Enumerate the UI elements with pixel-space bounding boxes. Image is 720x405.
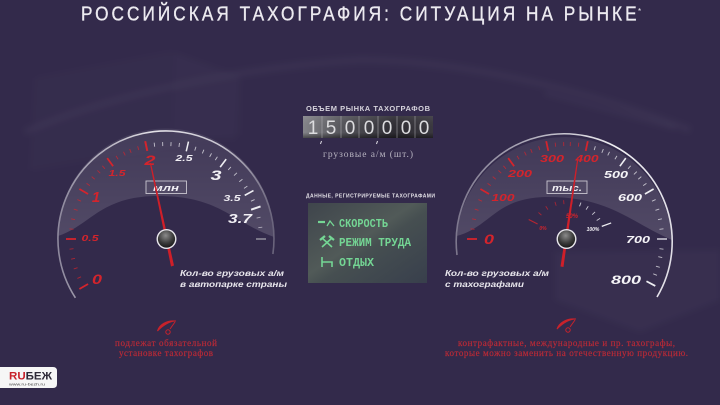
scale numbers: 2.5 — [174, 153, 193, 163]
scale numbers: 0.5 — [82, 233, 99, 243]
scale numbers: 0 — [92, 271, 102, 287]
scale numbers: 0% — [539, 226, 547, 232]
logo: RUБЕЖ: www.ru-bezh.ru — [9, 382, 45, 386]
scale numbers: 400 — [574, 154, 599, 165]
gauge: trucks with tachographs — [445, 134, 672, 297]
scale numbers: 1.5 — [108, 168, 126, 178]
hub — [556, 229, 576, 249]
red ticks — [66, 141, 147, 289]
icon: crossed hammers — [320, 236, 334, 247]
icon: red gauge — [557, 319, 576, 332]
scale numbers — [484, 154, 651, 287]
needle — [560, 157, 579, 267]
row: work mode: РЕЖИМ ТРУДА — [339, 237, 411, 250]
unit box: тыс. — [552, 183, 582, 194]
scale numbers: 500 — [604, 170, 629, 181]
counter body: 0 — [401, 118, 411, 139]
scale numbers: 3.5 — [224, 193, 241, 203]
logo: RUБЕЖ — [0, 367, 57, 388]
scale numbers: 100 — [492, 193, 515, 204]
callout text — [115, 338, 217, 358]
title: * — [638, 7, 641, 16]
callout text: которые можно заменить на отечественную продукцию. — [445, 348, 688, 358]
gauge: trucks in the national fleet — [58, 128, 288, 298]
gauge caption — [180, 268, 288, 289]
panel: market volume counter — [303, 104, 433, 160]
white ticks — [154, 142, 266, 239]
panel: data recorded by tachographs — [306, 194, 435, 283]
scale numbers: 100% — [587, 227, 600, 233]
callout text: подлежат обязательной — [115, 338, 217, 348]
icon: bed — [322, 257, 332, 267]
callout text: контрафактные, международные и пр. тахографы, — [458, 338, 675, 348]
counter body: 0 — [345, 118, 355, 139]
gauge caption: Кол-во грузовых а/м — [180, 268, 285, 278]
gauge caption: Кол-во грузовых а/м — [445, 268, 550, 278]
callout: replaceable tachographs — [445, 319, 688, 358]
callout text: установке тахографов — [119, 348, 213, 358]
scale numbers: 3.7 — [228, 211, 253, 226]
callout: mandatory installation — [115, 321, 217, 358]
gauge arc — [456, 134, 672, 297]
unit box — [547, 181, 587, 194]
scale numbers: 300 — [540, 154, 565, 165]
gauge caption: в автопарке страны — [180, 279, 288, 289]
callout text — [445, 338, 688, 358]
counter body: 1 — [308, 118, 318, 139]
scale numbers: 800 — [611, 273, 641, 287]
scale numbers — [82, 152, 253, 287]
scale numbers: 200 — [507, 169, 533, 180]
icon: red gauge — [158, 321, 176, 334]
counter heading: ОБЪЕМ РЫНКА ТАХОГРАФОВ — [306, 104, 431, 113]
unit box: млн — [153, 183, 179, 194]
row: speed: СКОРОСТЬ — [339, 218, 388, 231]
red ticks — [467, 141, 588, 239]
gauge band — [456, 137, 672, 240]
gauge band — [58, 128, 274, 237]
inner percent ticks — [529, 200, 611, 226]
logo: RUБЕЖ: RUБЕЖ — [9, 370, 52, 382]
counter caption: грузовые а/м (шт.) — [323, 149, 413, 160]
scale numbers: 600 — [618, 193, 643, 204]
scale numbers: 3 — [210, 167, 222, 183]
counter body: 5 — [326, 118, 336, 139]
scale numbers: 1 — [92, 189, 100, 206]
scale numbers: 2 — [143, 152, 156, 168]
counter body: 0 — [364, 118, 374, 139]
icon: speed — [318, 221, 334, 226]
scale numbers: 50% — [566, 214, 579, 220]
row: rest: ОТДЫХ — [339, 257, 374, 270]
scale numbers: 700 — [626, 235, 651, 246]
unit box — [146, 181, 186, 194]
scale numbers: 0 — [484, 231, 494, 247]
gauge arc — [58, 131, 274, 298]
counter body: 0 — [419, 118, 429, 139]
gauge caption: с тахографами — [445, 279, 525, 289]
panel heading: ДАННЫЕ, РЕГИСТРИРУЕМЫЕ ТАХОГРАФАМИ — [306, 194, 435, 200]
gauge caption — [445, 268, 550, 289]
counter body — [303, 116, 433, 144]
needle — [150, 163, 174, 266]
white ticks — [594, 146, 667, 286]
hub — [156, 229, 176, 249]
tachograph screen — [308, 203, 427, 283]
background: faint truck silhouettes — [25, 52, 720, 332]
counter body: 0 — [382, 118, 392, 139]
title: РОССИЙСКАЯ ТАХОГРАФИЯ: СИТУАЦИЯ НА РЫНКЕ — [81, 2, 637, 25]
